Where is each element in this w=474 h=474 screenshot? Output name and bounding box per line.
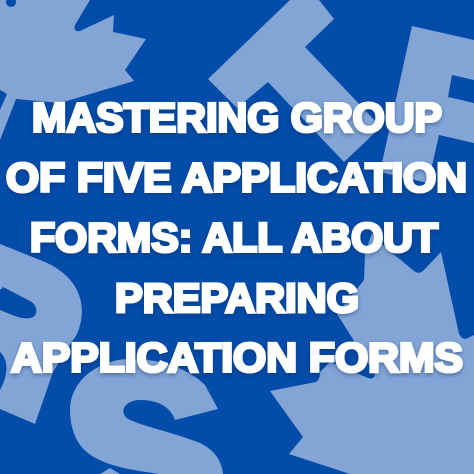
background shape: letter T — [208, 0, 381, 162]
title: OF FIVE APPLICATION — [6, 154, 467, 200]
background shape: letter fragment bottom — [100, 468, 120, 474]
background shape: letter S bottom — [70, 359, 223, 474]
title: APPLICATION FORMS — [11, 334, 463, 380]
background shape: letter F — [380, 26, 474, 183]
title: FORMS: ALL ABOUT — [30, 214, 438, 260]
background shape: maple leaf bottom right — [270, 233, 474, 474]
title: PREPARING — [115, 275, 359, 321]
title: MASTERING GROUP — [32, 94, 442, 140]
background shape: letter S left — [0, 244, 82, 424]
background shape: maple leaf top left — [0, 0, 146, 140]
title — [6, 94, 467, 380]
